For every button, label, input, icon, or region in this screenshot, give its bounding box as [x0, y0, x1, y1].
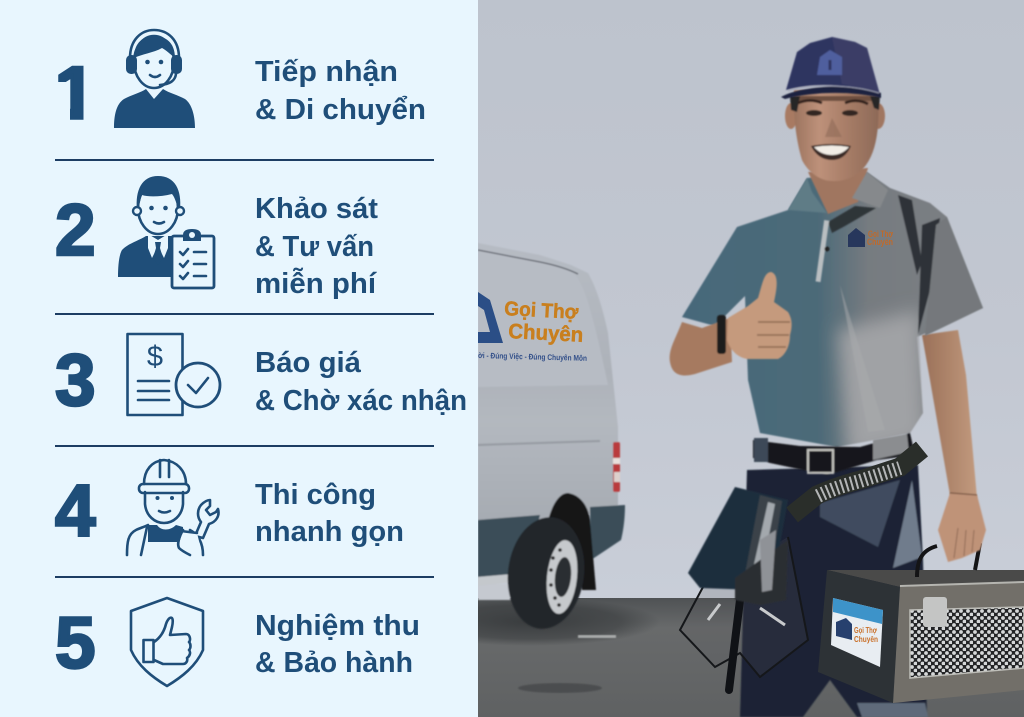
neck	[808, 168, 868, 214]
shirt logo: Gọi Thợ	[868, 229, 893, 239]
van logo: Gọi Thợ	[504, 298, 580, 324]
right arm	[922, 330, 977, 498]
delivery van	[478, 243, 625, 633]
van logo	[478, 292, 587, 363]
step 2: survey and advise	[55, 176, 378, 300]
number 3: 3	[55, 340, 96, 421]
label: step 2: miễn phí	[255, 266, 377, 300]
left arm with thumbs up	[670, 272, 792, 376]
box sticker: Gọi Thợ	[854, 626, 877, 635]
box sticker: Chuyên	[854, 635, 878, 644]
step 3: quote and confirm	[55, 334, 467, 421]
label: step 3: Báo giá	[255, 347, 362, 379]
van tyre	[506, 516, 584, 630]
label: step 1: Tiếp nhận	[255, 56, 398, 88]
cap	[781, 37, 881, 99]
head	[785, 90, 885, 181]
box sticker	[831, 598, 883, 667]
equipment box	[818, 543, 1024, 703]
wall background	[478, 0, 1024, 600]
label: step 3: & Chờ xác nhận	[255, 385, 467, 417]
hose	[792, 449, 922, 515]
label: step 5: & Bảo hành	[255, 647, 413, 679]
ground	[478, 598, 1024, 717]
shirt logo: Chuyên	[867, 237, 893, 247]
van rear bumper	[590, 505, 625, 560]
label: step 3	[255, 347, 467, 417]
icon: consultant with clipboard	[118, 176, 214, 288]
label: step 5: Nghiệm thu	[255, 610, 420, 642]
icon: call agent with headset	[114, 30, 195, 128]
label: step 1	[255, 56, 426, 126]
label: step 5	[255, 610, 420, 679]
van wheel hub	[545, 539, 579, 615]
machine body	[688, 487, 788, 605]
label: step 4: Thi công	[255, 479, 376, 511]
label: step 1: & Di chuyển	[255, 94, 426, 126]
panel: process steps	[54, 28, 466, 688]
number 2: 2	[55, 190, 96, 271]
box handle	[917, 543, 980, 577]
icon: quote document with check: $	[147, 341, 163, 373]
label: step 2: & Tư vấn	[255, 231, 374, 263]
belt	[753, 433, 915, 475]
frame	[680, 537, 808, 677]
shirt logo	[848, 228, 893, 247]
icon: shield with thumbs up	[131, 598, 203, 686]
polo shirt	[682, 172, 983, 460]
number 1: 1	[55, 53, 96, 134]
van wheel arch	[546, 493, 596, 590]
box mesh	[910, 607, 1024, 678]
van logo: Chuyên	[508, 320, 584, 347]
step 5: acceptance and warranty	[55, 598, 420, 686]
icon: quote document with check	[128, 334, 220, 415]
label: step 2	[255, 193, 378, 300]
box latch	[923, 597, 947, 627]
number 4: 4	[55, 471, 96, 552]
number 5: 5	[55, 603, 96, 684]
panel: photo of technician	[478, 0, 1024, 717]
label: step 4	[255, 479, 404, 548]
van tail light	[613, 442, 620, 492]
label: step 2: Khảo sát	[255, 193, 378, 225]
collar	[788, 172, 888, 282]
van logo: ời - Đúng Việc - Đúng Chuyên Môn	[478, 351, 587, 363]
trousers	[740, 465, 928, 717]
fogging machine	[680, 487, 808, 690]
van lower panel	[478, 515, 540, 577]
hand on handle	[938, 493, 986, 562]
label: step 4: nhanh gọn	[255, 516, 404, 548]
icon: worker with hard hat and wrench	[127, 460, 219, 555]
technician	[670, 37, 1024, 717]
step 4: fast execution	[55, 460, 404, 555]
step 1: receive and travel	[55, 30, 426, 134]
